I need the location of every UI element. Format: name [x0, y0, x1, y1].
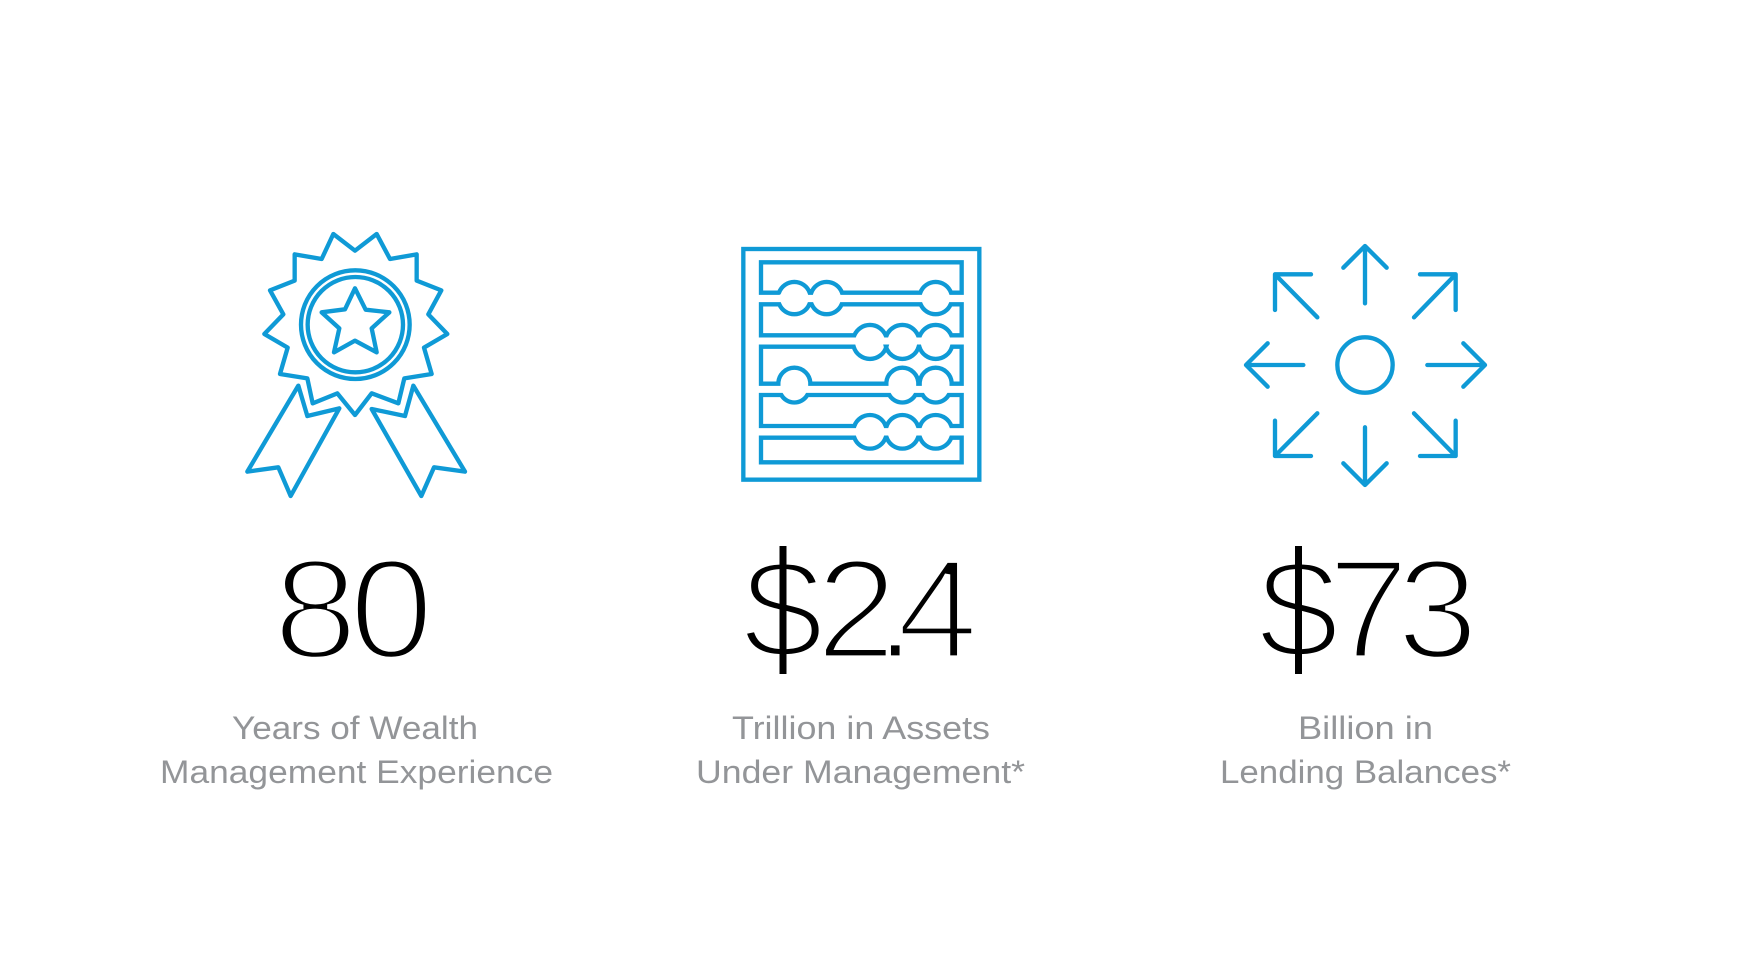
- label: trillion in assets under management: Under Management*: [696, 754, 1025, 790]
- label: trillion in assets under management: Trillion in Assets: [732, 710, 990, 746]
- panel: lending balances: [1220, 246, 1511, 790]
- label: years of wealth management experience: Years of Wealth: [232, 710, 478, 746]
- label: billion in lending balances: [1220, 710, 1511, 790]
- panel: assets under management: [696, 249, 1025, 790]
- label: billion in lending balances: Lending Balances*: [1220, 754, 1511, 790]
- label: billion in lending balances: Billion in: [1298, 710, 1433, 746]
- stat number: 80: 80: [273, 531, 434, 689]
- label: years of wealth management experience: Management Experience: [160, 754, 553, 790]
- panel: years of experience: [160, 234, 553, 790]
- label: trillion in assets under management: [696, 710, 1025, 790]
- icon: arrows radiating from circle: [1246, 246, 1485, 485]
- stat number: $73: $73: [1258, 530, 1478, 689]
- icon: award rosette with star: [247, 234, 465, 496]
- stat number: $2.4: $2.4: [742, 530, 978, 689]
- label: years of wealth management experience: [160, 710, 553, 790]
- icon: abacus: [743, 249, 979, 480]
